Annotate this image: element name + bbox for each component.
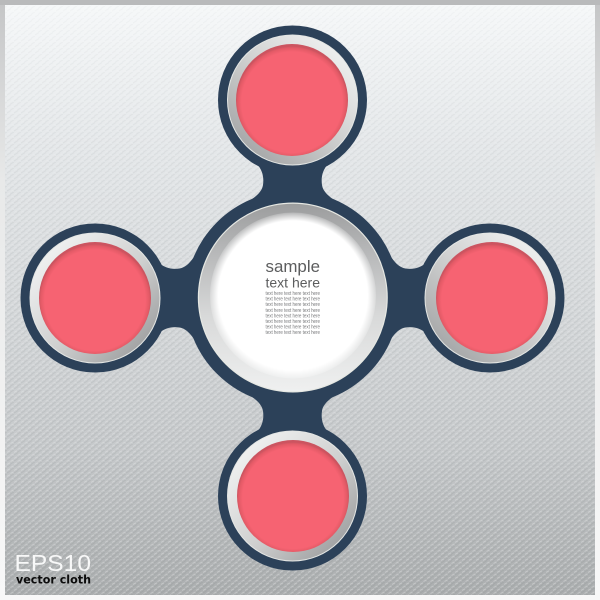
body text lines: text here text here text here [266,313,320,319]
heading: text here: text here [266,274,320,290]
right circle [424,232,556,364]
center text block [266,258,320,336]
body text lines [266,291,320,336]
label: EPS10: EPS10 [14,550,91,576]
center circle [198,202,388,392]
body text lines: text here text here text here [266,330,320,336]
body text lines: text here text here text here [266,291,320,297]
body text lines: text here text here text here [266,302,320,308]
left circle [30,232,160,364]
body text lines: text here text here text here [266,325,320,331]
body text lines: text here text here text here [266,308,320,314]
bottom circle [227,430,358,562]
heading: sample: sample [266,258,320,276]
body text lines: text here text here text here [266,319,320,325]
top circle [227,34,358,166]
label: vector cloth: vector cloth [16,572,91,586]
body text lines: text here text here text here [266,297,320,303]
